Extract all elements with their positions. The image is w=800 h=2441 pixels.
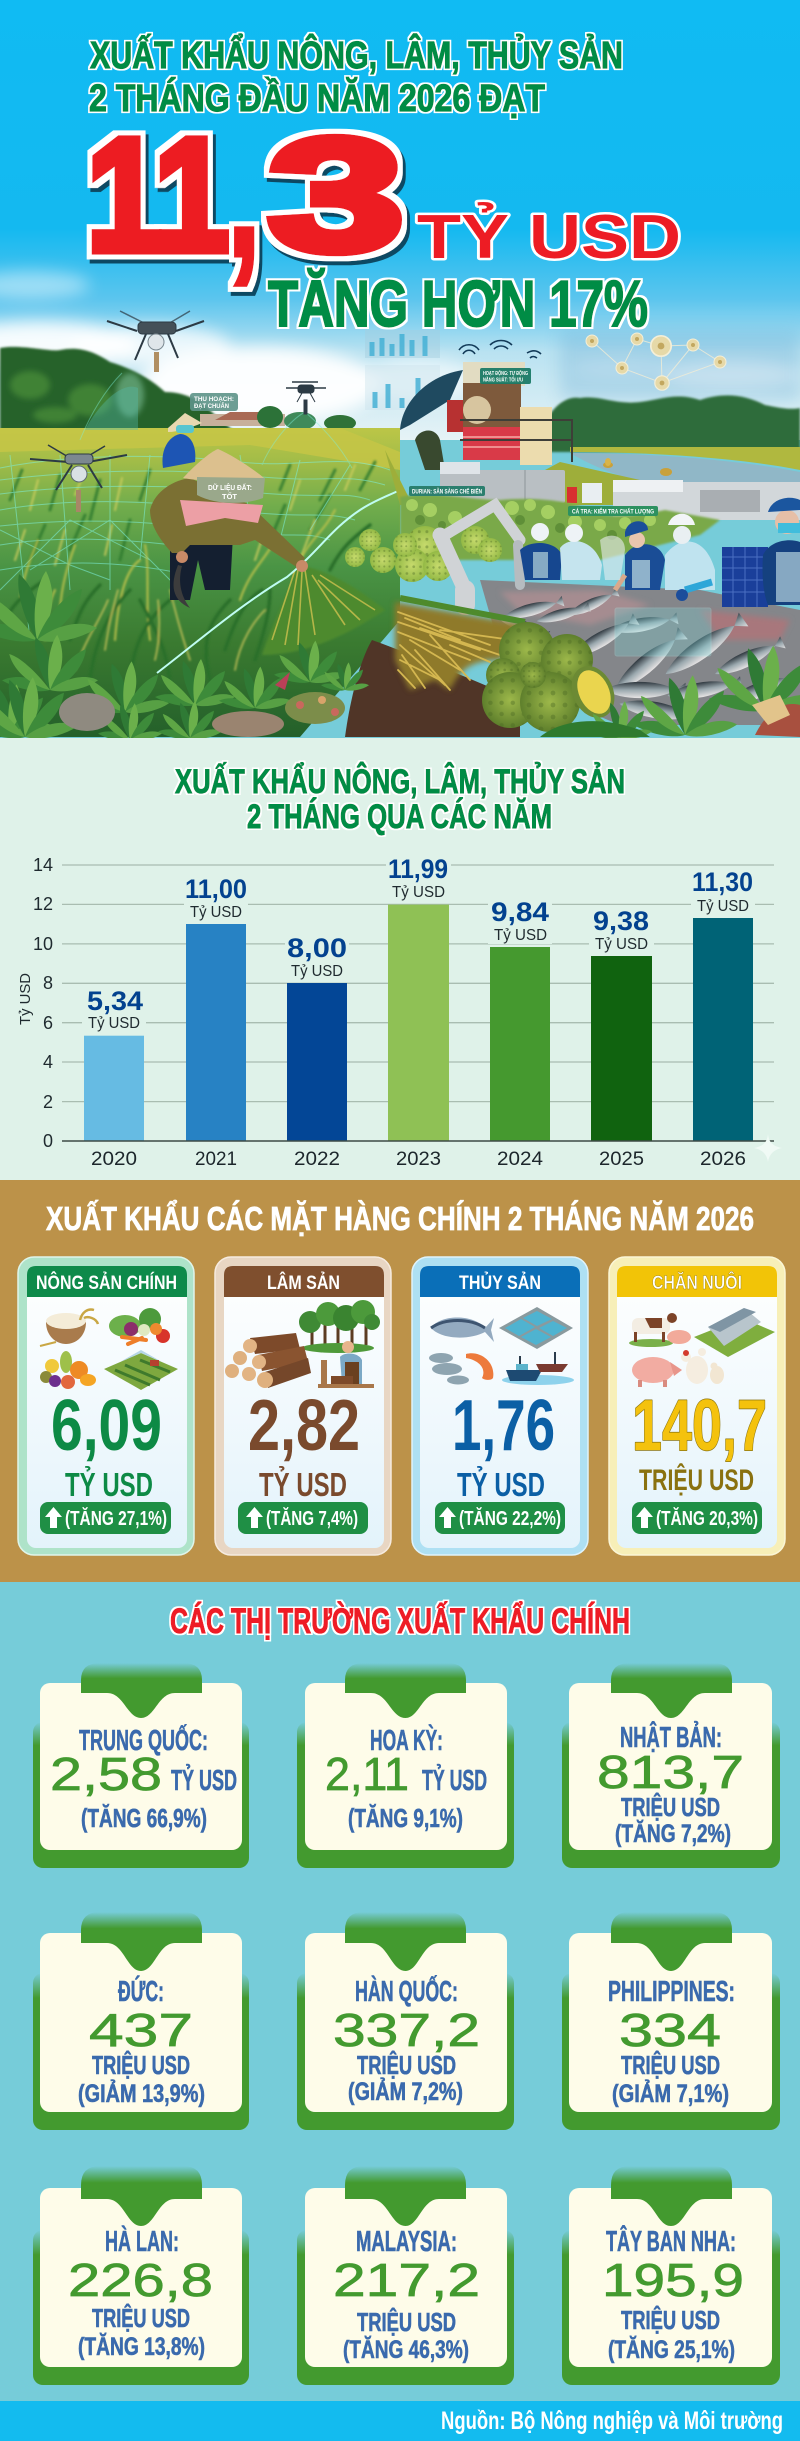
far rice strip and river: [570, 447, 800, 470]
data tag: harvester: NĂNG SUẤT: TỐI ƯU: [483, 376, 523, 384]
y axis tick labels: 6: [43, 1013, 53, 1033]
soil: [345, 640, 520, 737]
rice texture: [10, 462, 375, 565]
wifi icons: [459, 340, 541, 358]
network nodes: [586, 333, 726, 390]
bar 2021: [184, 874, 248, 1141]
market card: Spain: 195,9: [602, 2254, 744, 2306]
bar 2020: Tỷ USD: [88, 1015, 140, 1032]
y axis tick labels: 4: [43, 1052, 53, 1072]
bar 2022: [285, 933, 349, 1141]
bar 2021: 11,00: [185, 874, 247, 904]
market card: Malaysia: 217,2: [333, 2254, 480, 2306]
card: livestock products: CHĂN NUÔI: [652, 1272, 742, 1294]
hill highlights: [10, 371, 144, 423]
y axis title: Tỷ USD: [17, 973, 34, 1025]
card: agricultural products: 6,09: [51, 1386, 162, 1466]
bar 2026: [691, 867, 755, 1141]
market card: China: TỶ USD: [171, 1763, 237, 1797]
x axis year labels: 2023: [396, 1149, 441, 1170]
fish on processing table: [480, 580, 800, 726]
card: forest products: LÂM SẢN: [267, 1272, 340, 1294]
market card: South Korea: TRIỆU USD: [357, 2050, 456, 2080]
icon: farmland: [104, 1350, 178, 1390]
card: agricultural products: NÔNG SẢN CHÍNH: [36, 1272, 177, 1294]
sky background: [0, 0, 800, 440]
bar 2022: Tỷ USD: [291, 963, 343, 980]
icon: shrimp: [466, 1353, 493, 1380]
market card: Netherlands: TRIỆU USD: [92, 2303, 190, 2333]
blue tint sky right: [560, 330, 800, 400]
market card: China: 2,58: [50, 1748, 162, 1800]
drone small: [286, 382, 326, 414]
lettuce greens: [400, 495, 720, 560]
x axis year labels: [91, 1149, 746, 1170]
market card: Malaysia: [297, 2166, 514, 2385]
card: forest products: TỶ USD: [259, 1466, 347, 1503]
market card: Netherlands: (TĂNG 13,8%): [78, 2332, 205, 2361]
hero heading line 2: 2 THÁNG ĐẦU NĂM 2026 ĐẠT: [89, 76, 545, 120]
data tag: harvest: ĐẠT CHUẨN: [194, 401, 229, 410]
icon: up arrow: [439, 1507, 456, 1528]
harvester: [400, 362, 572, 470]
chart heading line 2: 2 THÁNG QUA CÁC NĂM: [247, 798, 552, 836]
card: livestock products: TRIỆU USD: [639, 1463, 754, 1497]
market card: United States: TỶ USD: [422, 1763, 487, 1797]
green plants bottom right: [540, 646, 800, 739]
card: livestock products: (TĂNG 20,3%): [656, 1507, 758, 1530]
market card: United States: HOA KỲ:: [370, 1723, 443, 1757]
y axis tick labels: 8: [43, 973, 53, 993]
rocks and flowering plant: [59, 672, 345, 737]
bar 2025: [589, 906, 654, 1141]
x axis year labels: 2026: [700, 1149, 746, 1170]
card: forest products: [215, 1257, 391, 1555]
panel: export chart by year: [0, 738, 800, 1180]
icon: log stack: [225, 1333, 311, 1388]
data tag: harvest: THU HOẠCH:: [194, 396, 234, 403]
market card: South Korea: 337,2: [333, 2004, 480, 2056]
bar 2024: Tỷ USD: [494, 927, 547, 944]
main farmer bending with sickle: [150, 449, 308, 608]
market card: Netherlands: HÀ LAN:: [105, 2224, 179, 2258]
market card: Malaysia: MALAYSIA:: [356, 2226, 457, 2258]
icon: fruits: [40, 1351, 96, 1389]
x axis year labels: 2021: [195, 1149, 237, 1170]
market card: China: [33, 1663, 249, 1868]
market card: United States: 2,11: [325, 1748, 409, 1800]
goods panel background: [0, 1180, 800, 1582]
left forest hill: [0, 347, 235, 432]
bar 2025: 9,38: [593, 906, 649, 936]
unit: tỷ USD: TỶ USD: [417, 203, 681, 272]
green rice patch middle: [385, 450, 640, 510]
card: agricultural products: (TĂNG 27,1%): [65, 1507, 167, 1530]
sensor grid on the rice field: [0, 373, 390, 640]
bar 2021: Tỷ USD: [190, 904, 242, 921]
rice plant strokes: [5, 510, 370, 690]
golden rice bundle: [395, 598, 525, 690]
market card: South Korea: HÀN QUỐC:: [355, 1974, 458, 2008]
icon: up arrow: [45, 1507, 62, 1528]
bar 2024: [488, 897, 552, 1141]
market card: Malaysia: (TĂNG 46,3%): [343, 2335, 469, 2364]
processing machines: [440, 462, 800, 520]
data tag: harvest: [190, 393, 238, 411]
icon: vegetables: [109, 1308, 170, 1344]
icon: chickens: [681, 1348, 724, 1384]
bar 2026: Tỷ USD: [697, 898, 749, 915]
chart panel background: [0, 738, 800, 1180]
data tag: harvester: [480, 368, 531, 384]
market card: Japan: NHẬT BẢN:: [620, 1720, 722, 1754]
clouds: [0, 271, 800, 423]
big number 11,3: 3: [268, 105, 404, 284]
data tag: harvester: HOẠT ĐỘNG: TỰ ĐỘNG: [483, 369, 528, 377]
right tree line: [543, 395, 800, 452]
village houses and trees: [200, 406, 356, 431]
drone mid-left: [30, 445, 127, 512]
factory workers: [520, 498, 800, 607]
card: agricultural products: TỶ USD: [65, 1466, 153, 1503]
market card: China: (TĂNG 66,9%): [81, 1803, 207, 1833]
market card: Philippines: PHILIPPINES:: [608, 1976, 735, 2008]
card: agricultural products: [18, 1257, 194, 1555]
bar 2022: 8,00: [287, 933, 347, 963]
bar 2024: 9,84: [491, 897, 549, 927]
hero illustration: smart agriculture, forestry and fishery scene: [0, 0, 800, 741]
card: fishery products: [412, 1257, 588, 1555]
market card: Germany: TRIỆU USD: [92, 2050, 190, 2080]
market card: Philippines: (GIẢM 7,1%): [612, 2078, 729, 2108]
market card: Spain: (TĂNG 25,1%): [608, 2335, 735, 2364]
hologram charts: [365, 330, 440, 410]
y axis tick labels: 0: [43, 1131, 53, 1151]
icon: trees: [299, 1300, 380, 1353]
x axis year labels: 2020: [91, 1149, 137, 1170]
y axis tick labels: [33, 855, 53, 1151]
buoys: [603, 458, 672, 476]
market card: China: TRUNG QUỐC:: [79, 1723, 208, 1757]
bar 2020: 5,34: [87, 986, 143, 1016]
durians and cut durian: [482, 622, 623, 732]
market card: South Korea: (GIẢM 7,2%): [348, 2076, 463, 2106]
cut green rice bundle: [262, 565, 385, 655]
pile of green durians: [345, 526, 502, 582]
hero heading line 1: XUẤT KHẨU NÔNG, LÂM, THỦY SẢN: [90, 32, 623, 77]
main farmer bending with sickle: TỐT: [222, 491, 237, 501]
golden rice horizon: [0, 428, 400, 470]
sparkle mark: [754, 1134, 782, 1162]
markets heading: CÁC THỊ TRƯỜNG XUẤT KHẨU CHÍNH: [170, 1601, 630, 1641]
market card: Philippines: [562, 1912, 780, 2130]
icon: tuna: [431, 1318, 494, 1342]
icon: barn: [694, 1308, 775, 1357]
icon: cow: [629, 1313, 677, 1347]
icon: fishing boats: [502, 1352, 574, 1385]
bar 2023: Tỷ USD: [392, 884, 445, 901]
icon: up arrow: [636, 1507, 653, 1528]
y axis tick labels: 2: [43, 1092, 53, 1112]
market card: Japan: TRIỆU USD: [621, 1792, 720, 1822]
bright network boundary line: [157, 490, 400, 673]
card: forest products: 2,82: [248, 1386, 360, 1466]
card: fishery products: (TĂNG 22,2%): [459, 1507, 561, 1530]
market card: United States: [297, 1663, 514, 1868]
market card: Spain: TRIỆU USD: [621, 2305, 720, 2335]
icon: carpenter: [318, 1341, 374, 1388]
growth: tăng hơn 17%: TĂNG HƠN 17%: [268, 267, 648, 340]
market card: Philippines: 334: [619, 2004, 721, 2056]
data tags: durian and fish: CÁ TRA: KIỂM TRA CHẤT LƯỢNG: [572, 506, 654, 516]
market card: Spain: [562, 2166, 780, 2385]
card: fishery products: 1,76: [452, 1386, 555, 1466]
icon: rice bowl: [40, 1309, 98, 1346]
big number 11,3: ,: [226, 85, 262, 297]
market card: Germany: 437: [89, 2004, 193, 2056]
hologram panel on fish: [615, 608, 711, 656]
footer source bar: [0, 2401, 800, 2441]
y axis tick labels: 10: [33, 934, 53, 954]
bar 2026: 11,30: [692, 867, 753, 897]
drone top: [107, 311, 204, 372]
card: fishery products: TỶ USD: [457, 1466, 545, 1503]
data tags: durian and fish: [409, 486, 658, 516]
markets panel background: [0, 1582, 800, 2401]
market card: Japan: [562, 1663, 780, 1868]
big number 11,3: [87, 85, 404, 297]
market card: Japan: 813,7: [597, 1746, 744, 1798]
icon: pig: [632, 1357, 682, 1387]
market card: Netherlands: 226,8: [68, 2254, 213, 2306]
icon: small fishes: [429, 1353, 469, 1384]
robot arms: [440, 505, 520, 605]
market card: Netherlands: [33, 2166, 249, 2385]
panel: main export goods: [0, 1180, 800, 1582]
y axis tick labels: 12: [33, 894, 53, 914]
y axis tick labels: 14: [33, 855, 53, 875]
bar 2023: [386, 854, 451, 1141]
green foreground plants left: [0, 571, 369, 741]
card: fishery products: THỦY SẢN: [459, 1272, 541, 1294]
chart heading line 1: XUẤT KHẨU NÔNG, LÂM, THỦY SẢN: [175, 762, 625, 801]
x axis year labels: 2024: [497, 1149, 543, 1170]
panel: main export markets: [0, 1582, 800, 2401]
icon: small pig: [667, 1330, 691, 1344]
holographic dome panel: [85, 387, 138, 430]
big number 11,3: 11: [87, 105, 229, 284]
field: [0, 428, 400, 737]
market card: Germany: ĐỨC:: [118, 1974, 164, 2008]
icon: up arrow: [246, 1507, 263, 1528]
market card: Japan: (TĂNG 7,2%): [615, 1819, 731, 1848]
icon: fish ponds: [499, 1307, 573, 1349]
main farmer bending with sickle: DỮ LIỆU ĐẤT:: [208, 482, 252, 492]
x axis year labels: 2022: [294, 1149, 340, 1170]
market card: Germany: (GIẢM 13,9%): [78, 2078, 205, 2108]
data tags: durian and fish: DURIAN: SẴN SÀNG CHẾ BIẾN: [412, 486, 482, 496]
market card: Philippines: TRIỆU USD: [621, 2050, 720, 2080]
card: forest products: (TĂNG 7,4%): [266, 1507, 358, 1530]
background farmer in blue shirt: [162, 413, 202, 468]
bar 2023: 11,99: [388, 854, 448, 884]
bar 2025: Tỷ USD: [595, 936, 648, 953]
x axis year labels: 2025: [599, 1149, 644, 1170]
bar 2020: [82, 986, 146, 1141]
market card: United States: (TĂNG 9,1%): [348, 1803, 463, 1833]
market card: Malaysia: TRIỆU USD: [357, 2307, 456, 2337]
market card: South Korea: [297, 1912, 514, 2130]
market card: Germany: [33, 1912, 249, 2130]
card: livestock products: [609, 1257, 785, 1555]
